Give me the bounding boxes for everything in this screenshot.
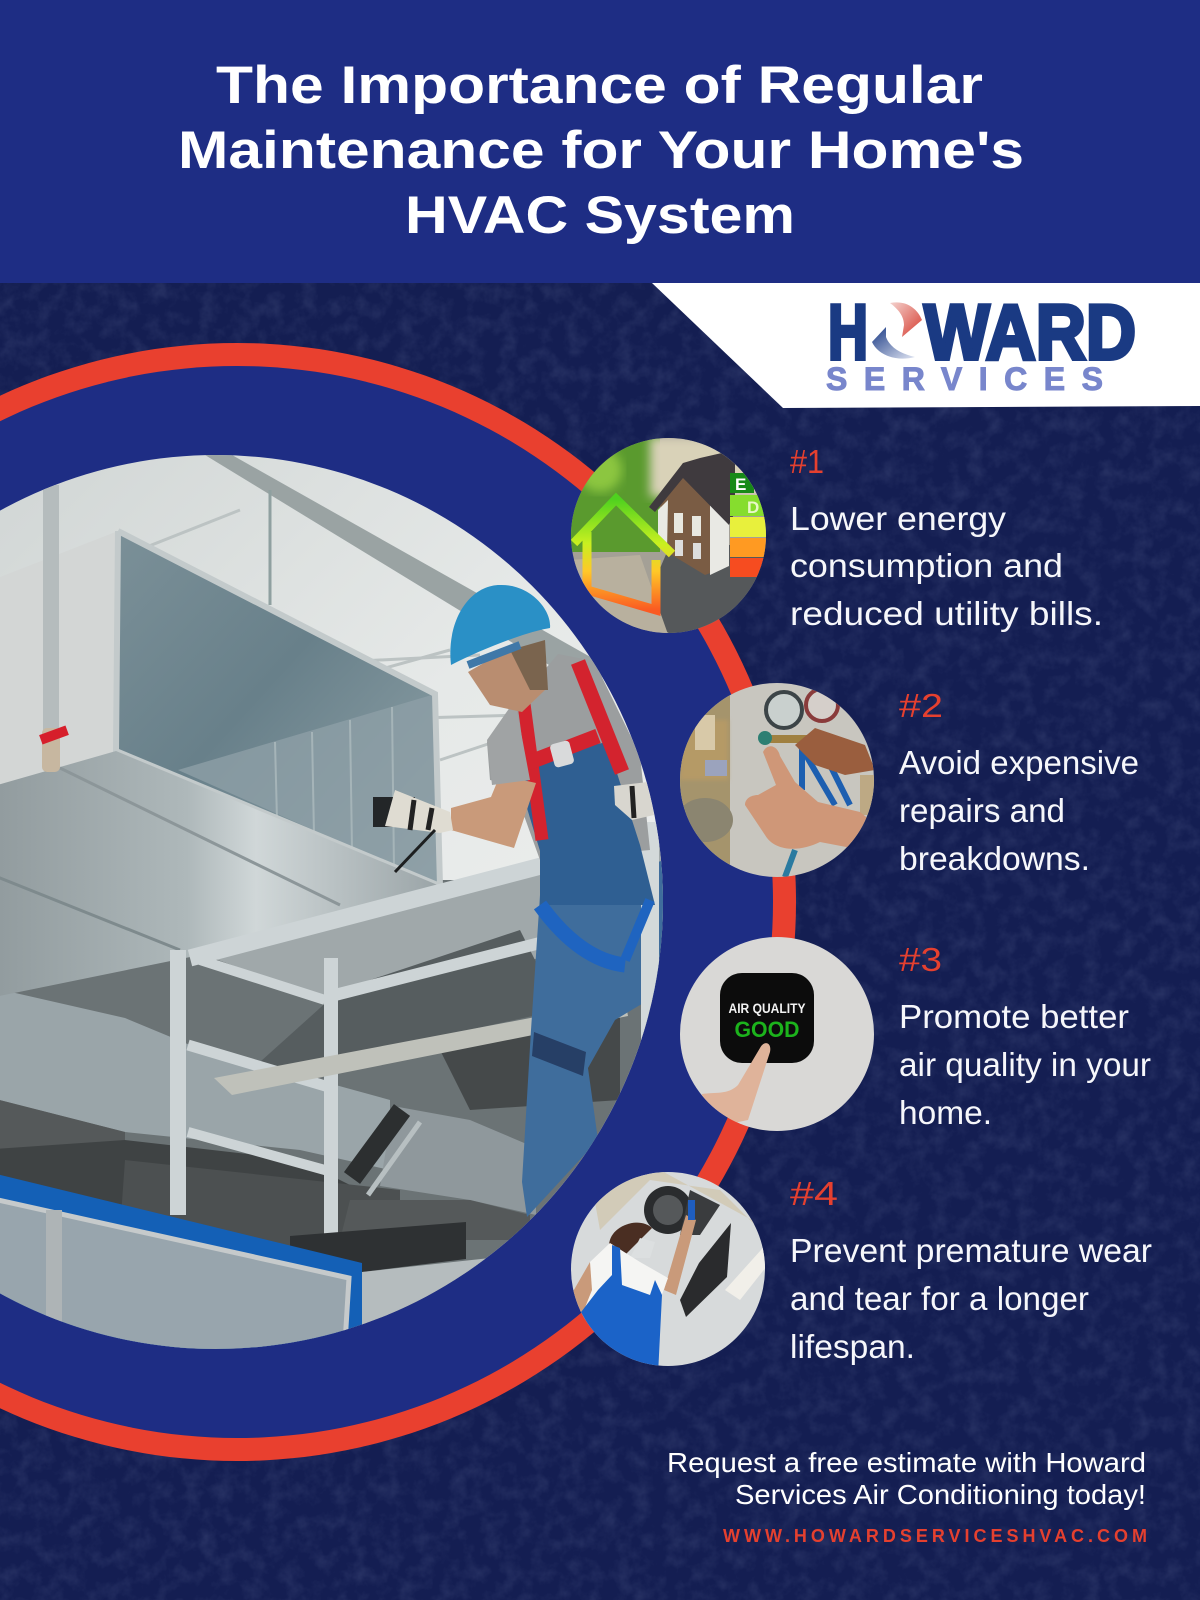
thumbs-up hand — [745, 746, 876, 850]
energy bars: E — [735, 475, 746, 494]
item 2: avoid expensive repairs — [899, 687, 1139, 877]
photo 2: technician thumbs up at gauges — [677, 683, 876, 879]
photo 3: air quality display — [680, 937, 876, 1133]
item 1: lower energy consumption: consumption and — [790, 547, 1063, 584]
call to action: Services Air Conditioning today! — [735, 1479, 1146, 1510]
website url: WWW.HOWARDSERVICESHVAC.COM — [723, 1526, 1147, 1546]
title: Maintenance for Your Home's — [178, 121, 1024, 180]
energy bars — [730, 473, 768, 577]
title: The Importance of Regular — [216, 56, 983, 115]
technician — [373, 585, 665, 1217]
tent seams — [150, 508, 505, 762]
red ring — [0, 343, 796, 1461]
title — [178, 56, 1024, 245]
logo: Howard Services — [826, 288, 1136, 397]
logo banner — [652, 283, 1200, 408]
item 4: prevent premature wear: and tear for a longer — [790, 1280, 1089, 1317]
shirt — [487, 654, 650, 860]
hand on manifold — [795, 728, 875, 775]
item 2: avoid expensive repairs: repairs and — [899, 792, 1065, 829]
harness — [524, 662, 622, 840]
duct underside — [0, 751, 440, 1000]
left vertical pipe and valve — [43, 485, 59, 730]
ceiling fan unit — [644, 1186, 720, 1235]
scaffold plank — [214, 1012, 628, 1095]
glasses — [468, 645, 520, 665]
energy house outline — [574, 499, 672, 610]
back duct left — [0, 985, 390, 1170]
house — [649, 450, 735, 575]
blue panel — [0, 1170, 362, 1360]
finger — [700, 1043, 770, 1130]
dark pipe — [352, 1110, 402, 1178]
ceiling beam — [205, 455, 610, 690]
gloves and meter — [373, 797, 415, 827]
air quality device: GOOD — [734, 1017, 800, 1042]
helmet — [450, 585, 550, 665]
item 1: lower energy consumption: Lower energy — [790, 500, 1007, 537]
shirt and overalls — [578, 1243, 668, 1320]
duct left face — [0, 558, 115, 784]
item 2: avoid expensive repairs: #2 — [899, 687, 943, 724]
logo: Howard Services: SERVICES — [826, 361, 1103, 397]
item 3: better air quality: #3 — [899, 941, 942, 978]
title: HVAC System — [405, 186, 795, 245]
photo 4: technician servicing ceiling unit — [570, 1170, 770, 1375]
call to action: Request a free estimate with Howard — [667, 1447, 1146, 1478]
item 3: better air quality — [899, 941, 1151, 1131]
item 1: lower energy consumption: #1 — [790, 443, 824, 480]
back duct right — [380, 1106, 536, 1215]
scaffold — [170, 858, 540, 1234]
technician legs — [522, 860, 665, 1217]
item 1: lower energy consumption: reduced utility bills. — [790, 595, 1103, 632]
energy bars: D — [747, 498, 759, 517]
filter panel — [680, 1223, 731, 1317]
item 4: prevent premature wear: Prevent premature wear — [790, 1232, 1152, 1269]
arm — [451, 775, 536, 848]
head and arm — [609, 1200, 696, 1295]
head — [468, 648, 545, 712]
item 4: prevent premature wear — [790, 1175, 1152, 1365]
duct opening — [116, 531, 440, 886]
main photo: technician inspecting ductwork — [0, 450, 680, 1360]
air quality device — [720, 973, 814, 1063]
hoses — [785, 745, 850, 877]
back vertical scaffold pole — [641, 822, 659, 1042]
blue disc inside ring — [0, 366, 773, 1438]
header band — [0, 0, 1200, 283]
item 3: better air quality: air quality in your — [899, 1046, 1151, 1083]
logo: Howard Services: WARD — [924, 288, 1136, 376]
air quality device: AIR QUALITY — [728, 1001, 806, 1016]
lower dark ceiling — [0, 880, 680, 1360]
item 3: better air quality: home. — [899, 1094, 992, 1131]
photo 1: energy-efficient house — [570, 437, 770, 640]
logo: Howard Services: H — [828, 288, 868, 376]
gauges — [766, 689, 838, 728]
item 2: avoid expensive repairs: Avoid expensive — [899, 744, 1139, 781]
item 4: prevent premature wear: lifespan. — [790, 1328, 915, 1365]
call to action — [667, 1447, 1146, 1510]
overalls bib — [513, 742, 655, 905]
item 1: lower energy consumption — [790, 443, 1103, 632]
item 4: prevent premature wear: #4 — [790, 1175, 838, 1212]
basket and platform — [290, 1222, 466, 1272]
item 3: better air quality: Promote better — [899, 998, 1129, 1035]
item 2: avoid expensive repairs: breakdowns. — [899, 840, 1090, 877]
